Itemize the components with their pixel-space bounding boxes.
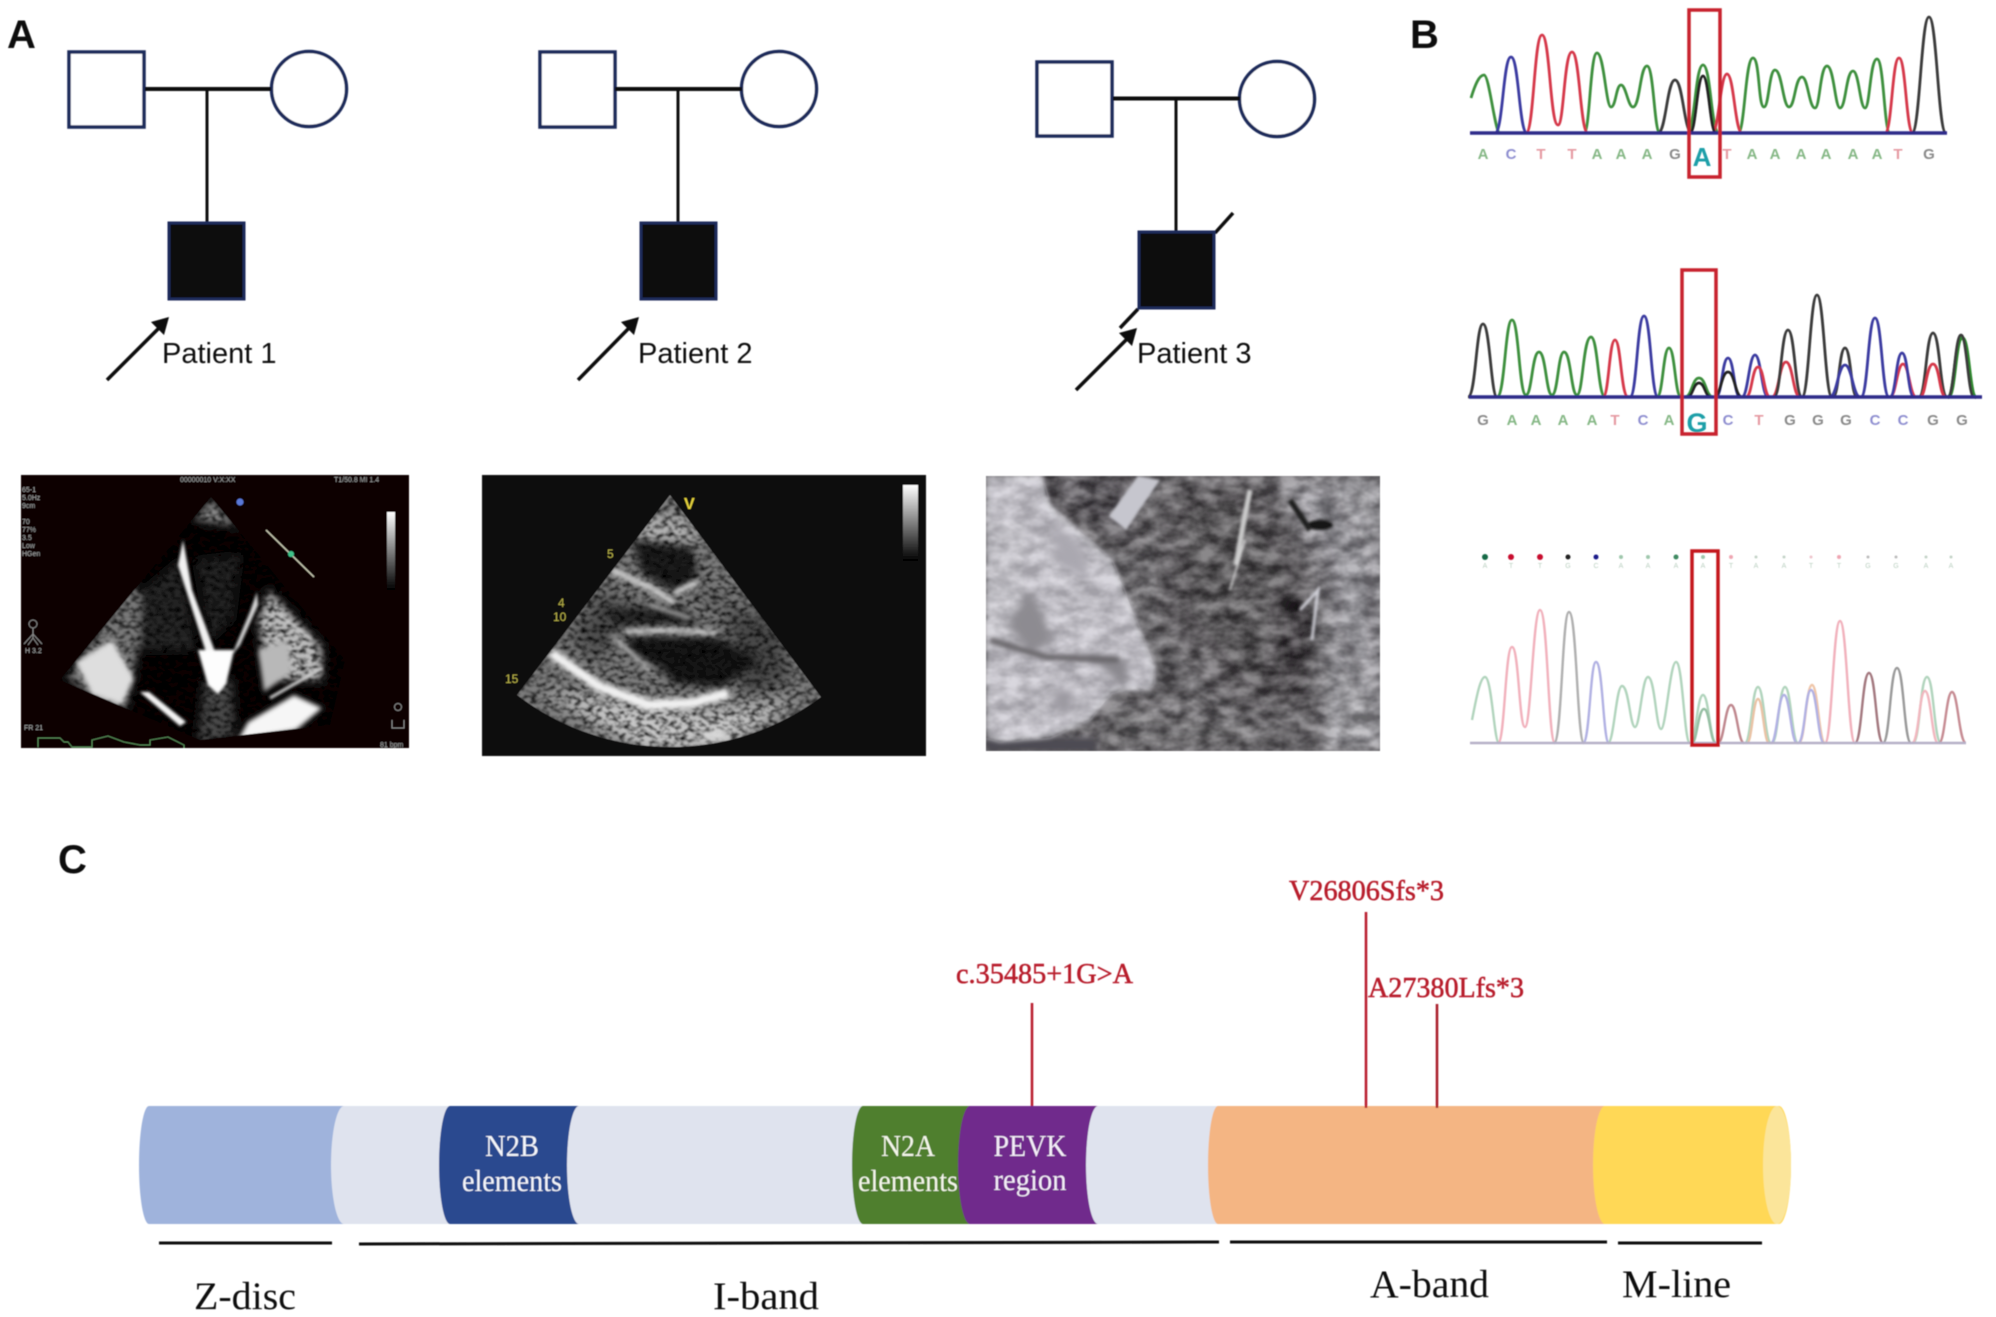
base calls: G bbox=[1477, 412, 1489, 429]
chart: titin domain bar bbox=[139, 1106, 1791, 1224]
second row of calls: T bbox=[1729, 563, 1734, 570]
icon: father square bbox=[69, 52, 144, 127]
base calls bbox=[1478, 142, 1935, 172]
label: Patient 2: Patient 2 bbox=[638, 338, 752, 370]
icon: father square bbox=[540, 52, 615, 127]
base calls: A bbox=[1664, 412, 1675, 429]
mutation marker: A27380Lfs*3: A27380Lfs*3 bbox=[1368, 973, 1524, 1004]
baseline bbox=[1470, 742, 1966, 744]
base calls: C bbox=[1506, 146, 1517, 163]
descent line bbox=[206, 89, 208, 223]
mottling on hand bbox=[986, 476, 1166, 751]
depth markers: 4 bbox=[558, 596, 565, 610]
N2A label: N2A bbox=[881, 1128, 936, 1163]
icon: body marker bbox=[24, 620, 404, 728]
segment: PEVK region bbox=[958, 1106, 1120, 1224]
base calls: A bbox=[1747, 146, 1758, 163]
base calls: C bbox=[1638, 412, 1649, 429]
traces bbox=[1472, 610, 1966, 743]
echo readouts: 3.5 bbox=[22, 535, 32, 542]
depth markers: 15 bbox=[505, 672, 519, 686]
descent line bbox=[1174, 98, 1178, 232]
organ and background tones bbox=[1045, 476, 1385, 751]
segment: N2B elements bbox=[439, 1106, 620, 1224]
pedigree: patient 3 family bbox=[1037, 62, 1314, 390]
descent line bbox=[676, 89, 680, 223]
base calls: A bbox=[1478, 146, 1489, 163]
N2B label: N2B bbox=[485, 1128, 539, 1163]
dark bottom corner bbox=[986, 738, 1096, 751]
specimen tag bbox=[1109, 476, 1160, 530]
image: autopsy photograph bbox=[986, 476, 1385, 751]
panel label A: A bbox=[7, 13, 36, 57]
segment: I-band middle bbox=[567, 1106, 900, 1224]
segment: I-band proximal bbox=[331, 1106, 500, 1224]
N2B label: elements bbox=[462, 1163, 562, 1198]
echo readouts: 77% bbox=[22, 527, 36, 534]
highlight box bbox=[1692, 551, 1718, 745]
chart: sequencing chromatogram 2 bbox=[1468, 270, 1982, 438]
icon: affected son square bbox=[169, 223, 244, 299]
echo sector structures bbox=[60, 497, 344, 740]
base calls: C bbox=[1898, 412, 1909, 429]
speckle texture bbox=[516, 496, 822, 748]
base calls: G bbox=[1686, 408, 1708, 438]
icon: affected son square bbox=[641, 223, 716, 299]
base calls: T bbox=[1754, 412, 1764, 429]
base calls bbox=[1477, 408, 1968, 438]
baseline bbox=[1469, 395, 1982, 399]
base calls: C bbox=[1870, 412, 1881, 429]
panel label B: B bbox=[1410, 13, 1439, 57]
echo readouts: 65-1 bbox=[22, 487, 36, 494]
base calls: C bbox=[1723, 412, 1734, 429]
pale hand and limb bbox=[986, 476, 1155, 742]
second row of calls: T bbox=[1538, 563, 1543, 570]
base calls: A bbox=[1796, 146, 1807, 163]
base calls: A bbox=[1587, 412, 1598, 429]
segment: A-band bbox=[1208, 1106, 1640, 1224]
label: Z-disc: Z-disc bbox=[194, 1275, 296, 1317]
echo readouts: 5.0Hz bbox=[22, 495, 41, 502]
mottled texture bbox=[986, 476, 1380, 751]
icon: mother circle bbox=[742, 52, 816, 126]
label: A-band: A-band bbox=[1370, 1263, 1490, 1306]
base calls: A bbox=[1848, 146, 1859, 163]
second row of calls: A bbox=[1701, 563, 1706, 570]
marker dots bbox=[236, 498, 294, 557]
pedigree: patient 1 family bbox=[69, 52, 346, 380]
depth markers bbox=[505, 496, 695, 686]
echo readouts: 9cm bbox=[22, 503, 35, 510]
PEVK label: region bbox=[994, 1162, 1067, 1197]
base calls: T bbox=[1722, 146, 1732, 163]
marriage line bbox=[615, 87, 742, 91]
base calls: G bbox=[1927, 412, 1939, 429]
arrow: proband bbox=[578, 317, 639, 380]
depth markers: 5 bbox=[607, 547, 614, 561]
traces bbox=[1471, 17, 1946, 133]
second row of calls: A bbox=[1949, 563, 1954, 570]
mutation marker: c.35485+1G>A: c.35485+1G>A bbox=[956, 959, 1134, 990]
cylinder end cap bbox=[1763, 1106, 1791, 1224]
base calls: G bbox=[1812, 412, 1824, 429]
grayscale bar bbox=[387, 512, 395, 590]
echo readouts: FR 21 bbox=[24, 725, 43, 732]
echo readouts: 81 bpm bbox=[380, 742, 404, 749]
base calls: G bbox=[1923, 146, 1935, 163]
grayscale bar bbox=[903, 485, 918, 561]
label: Patient 3: Patient 3 bbox=[1137, 338, 1251, 370]
segment: M-line bbox=[1593, 1106, 1791, 1224]
base calls: A bbox=[1507, 412, 1518, 429]
second row of calls bbox=[1483, 563, 1954, 570]
depth ruler bbox=[266, 530, 314, 577]
mutation marker: V26806Sfs*3: V26806Sfs*3 bbox=[1289, 876, 1444, 907]
second row of calls: A bbox=[1619, 563, 1624, 570]
image: echocardiogram patient 2 bbox=[482, 475, 926, 760]
icon: affected deceased son square bbox=[1139, 232, 1214, 308]
N2A label bbox=[858, 1128, 958, 1198]
echo readouts: Low bbox=[22, 543, 36, 550]
region bracket lines bbox=[159, 1242, 1762, 1244]
depth markers: V bbox=[684, 496, 695, 513]
second row of calls: A bbox=[1674, 563, 1679, 570]
echo readouts: 00000010 V:X:XX bbox=[180, 477, 236, 484]
base calls: T bbox=[1567, 146, 1577, 163]
PEVK label bbox=[994, 1128, 1067, 1197]
arrow: proband bbox=[1076, 328, 1137, 390]
base calls: G bbox=[1840, 412, 1852, 429]
arrow: proband bbox=[107, 317, 169, 380]
base calls: A bbox=[1531, 412, 1542, 429]
base calls: T bbox=[1536, 146, 1546, 163]
image: echocardiogram patient 1 bbox=[21, 475, 409, 749]
chart: sequencing chromatogram 3 bbox=[1470, 551, 1966, 745]
ECG trace bbox=[38, 736, 184, 748]
second row of calls: A bbox=[1924, 563, 1929, 570]
second row of calls: T bbox=[1837, 563, 1842, 570]
label: Patient 1: Patient 1 bbox=[162, 338, 276, 370]
segment: I-band distal bbox=[1086, 1106, 1240, 1224]
second row of calls: A bbox=[1782, 563, 1787, 570]
echo readouts: H 3.2 bbox=[25, 648, 42, 655]
segment: N2A elements bbox=[852, 1106, 1000, 1224]
echo sector structures bbox=[516, 494, 822, 748]
pedigree: patient 2 family bbox=[540, 52, 816, 380]
base calls: A bbox=[1616, 146, 1627, 163]
speckle texture bbox=[60, 498, 344, 740]
PEVK label: PEVK bbox=[994, 1128, 1067, 1163]
base calls: A bbox=[1770, 146, 1781, 163]
icon: deceased marker slash bbox=[1120, 213, 1233, 328]
base calls: A bbox=[1821, 146, 1832, 163]
icon: father square bbox=[1037, 62, 1112, 136]
highlight box bbox=[1682, 270, 1716, 434]
marriage line bbox=[1113, 96, 1240, 100]
second row of calls: A bbox=[1483, 563, 1488, 570]
depth markers: 10 bbox=[553, 610, 567, 624]
icon: mother circle bbox=[1240, 62, 1314, 136]
base calls: A bbox=[1693, 142, 1712, 172]
base calls: A bbox=[1642, 146, 1653, 163]
second row of calls: A bbox=[1754, 563, 1759, 570]
echo readouts: HGen bbox=[22, 551, 40, 558]
marriage line bbox=[145, 87, 271, 91]
base calls: T bbox=[1893, 146, 1903, 163]
second row of calls: C bbox=[1593, 563, 1599, 570]
panel label C: C bbox=[58, 838, 87, 882]
base calls: A bbox=[1592, 146, 1603, 163]
traces bbox=[1468, 295, 1976, 397]
base calls: T bbox=[1610, 412, 1620, 429]
base calls: A bbox=[1558, 412, 1569, 429]
call dots bbox=[1482, 554, 1952, 560]
highlights on tissue bbox=[1230, 490, 1333, 640]
baseline bbox=[1470, 131, 1947, 135]
echo readouts: 70 bbox=[22, 519, 30, 526]
echo readouts: T1/50.8 MI 1.4 bbox=[334, 477, 379, 484]
base calls: G bbox=[1956, 412, 1968, 429]
second row of calls: T bbox=[1809, 563, 1814, 570]
icon: mother circle bbox=[272, 52, 346, 126]
second row of calls: G bbox=[1565, 563, 1571, 570]
label: M-line: M-line bbox=[1622, 1263, 1731, 1306]
second row of calls: G bbox=[1893, 563, 1899, 570]
base calls: G bbox=[1669, 146, 1681, 163]
highlight box bbox=[1689, 10, 1720, 177]
base calls: A bbox=[1872, 146, 1883, 163]
label: I-band: I-band bbox=[713, 1275, 820, 1317]
base calls: G bbox=[1784, 412, 1796, 429]
second row of calls: T bbox=[1509, 563, 1514, 570]
chart: sequencing chromatogram 1 bbox=[1470, 10, 1947, 177]
second row of calls: A bbox=[1646, 563, 1651, 570]
second row of calls: G bbox=[1865, 563, 1871, 570]
N2B label bbox=[462, 1128, 562, 1198]
echo readouts bbox=[22, 477, 404, 749]
segment: Z-disc bbox=[139, 1106, 400, 1224]
N2A label: elements bbox=[858, 1163, 958, 1198]
